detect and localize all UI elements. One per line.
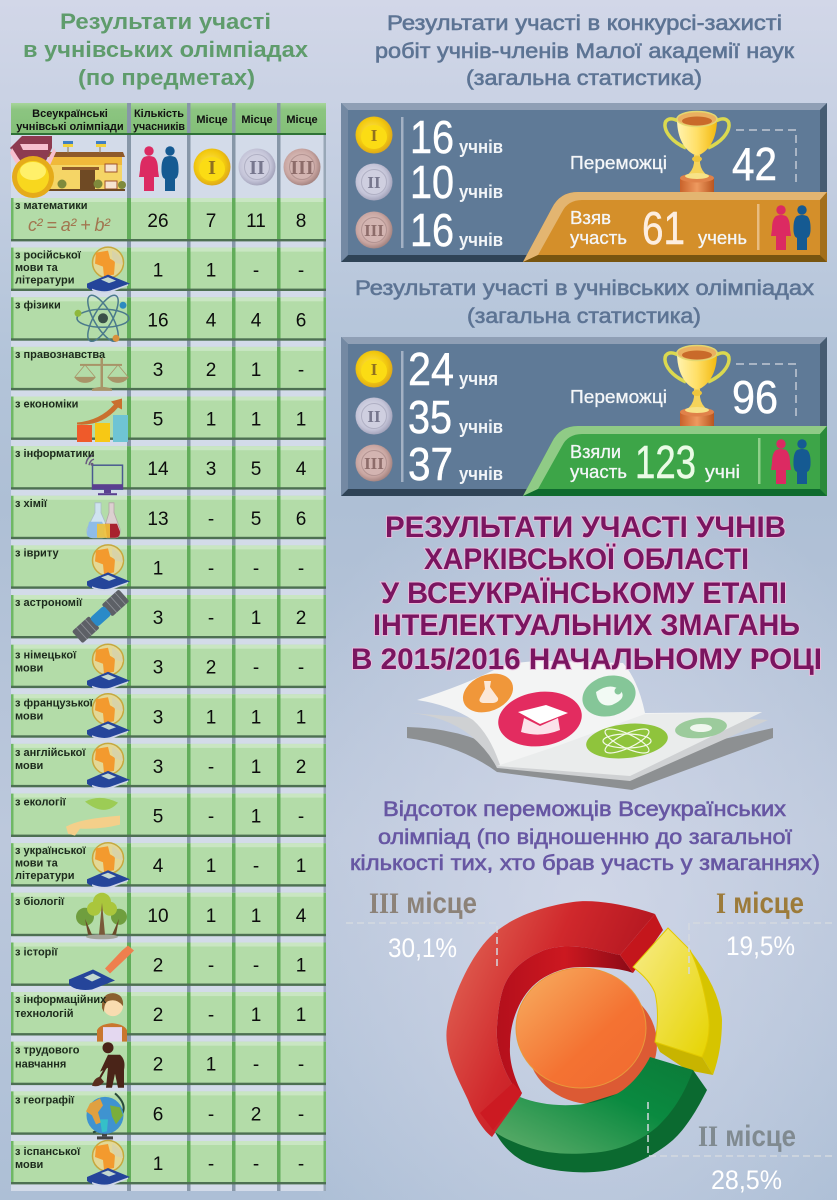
winners total with trophy xyxy=(570,112,796,192)
row: informatics xyxy=(11,446,326,495)
row: russian language and literature xyxy=(11,247,326,293)
medal counts: III xyxy=(364,221,384,240)
row: french: 1 xyxy=(296,707,306,728)
label: I place: 19,5% xyxy=(726,931,795,961)
segment: II place 28,5% xyxy=(495,1057,707,1172)
medal counts xyxy=(356,343,503,490)
row: economics: з економіки xyxy=(15,398,78,410)
row: economics: 5 xyxy=(153,410,163,430)
row: ecology: 5 xyxy=(153,807,163,828)
row: ecology: з екології xyxy=(15,797,67,809)
medal counts: I xyxy=(371,126,378,145)
row: mathematics: з математики xyxy=(15,200,88,212)
table header: учнівські олімпіади xyxy=(16,121,124,133)
label: II place: II місце xyxy=(698,1120,796,1153)
label: III place: 30,1% xyxy=(388,933,457,963)
medal counts xyxy=(356,111,503,256)
row: history xyxy=(11,942,326,990)
panel: olympiad overall statistics xyxy=(341,337,827,496)
row: information technology: з інформаційних xyxy=(15,994,107,1006)
illustration: open book with subject icons xyxy=(407,661,773,790)
row: chemistry: 5 xyxy=(251,509,261,530)
medal counts: 24 xyxy=(408,343,454,395)
row: informatics: 5 xyxy=(251,459,261,480)
row: french: з французької xyxy=(15,697,94,709)
participants banner: участь xyxy=(570,462,627,482)
row: ukrainian language and literature: 1 xyxy=(296,856,306,877)
row: biology: 1 xyxy=(251,906,261,927)
row: ukrainian language and literature: мови та xyxy=(15,858,59,870)
row: law: - xyxy=(298,360,304,381)
medal counts: учнів xyxy=(459,137,503,157)
row: physics: з фізики xyxy=(15,299,61,311)
medal counts: 10 xyxy=(410,156,454,208)
heading: percentage of winners xyxy=(350,798,820,875)
row: ecology: 1 xyxy=(251,807,261,828)
medal counts: учнів xyxy=(459,464,503,484)
heading: olympiad overall statistics: (загальна статистика) xyxy=(467,305,701,328)
row: information technology xyxy=(11,992,326,1042)
winners total with trophy: 42 xyxy=(732,138,777,190)
row: english: 1 xyxy=(251,757,261,778)
row: german: 2 xyxy=(206,658,216,679)
row: hebrew: - xyxy=(208,558,214,579)
row: history: - xyxy=(208,956,214,976)
participants banner: учень xyxy=(698,228,747,248)
participants banner: Взяв xyxy=(570,208,611,228)
main title: РЕЗУЛЬТАТИ УЧАСТІ УЧНІВ xyxy=(385,511,786,544)
row: labour training: - xyxy=(253,1055,259,1076)
icon row: medal and school: I xyxy=(208,157,216,179)
row: astronomy: 2 xyxy=(296,608,306,629)
main title: ІНТЕЛЕКТУАЛЬНИХ ЗМАГАНЬ xyxy=(373,609,800,642)
row: history: з історії xyxy=(15,946,58,958)
row: labour training: навчання xyxy=(15,1059,66,1071)
row: biology: 4 xyxy=(296,906,307,927)
row: spanish: з іспанської xyxy=(15,1146,81,1158)
table: olympiad results by subject xyxy=(10,103,326,1191)
row: german: мови xyxy=(15,663,43,675)
row: geography: 6 xyxy=(153,1104,163,1125)
heading: academy contest statistics xyxy=(375,12,795,90)
segment: I place 19,5% xyxy=(633,928,722,1075)
row: information technology: 1 xyxy=(251,1005,261,1026)
icon row: medal and school: III xyxy=(290,157,314,179)
row: biology: 1 xyxy=(206,906,216,927)
row: chemistry: 13 xyxy=(147,509,169,530)
participants banner: 123 xyxy=(635,436,696,488)
table header: Місце xyxy=(286,114,318,126)
row: chemistry: 6 xyxy=(296,509,306,530)
row: astronomy: 1 xyxy=(251,608,261,629)
row: biology: 10 xyxy=(147,906,169,927)
medal counts: 16 xyxy=(410,111,454,163)
row: chemistry: з хімії xyxy=(15,498,48,510)
row: biology xyxy=(11,893,326,939)
row: mathematics: 11 xyxy=(246,211,266,232)
row: hebrew: - xyxy=(253,558,259,579)
heading: olympiad overall statistics xyxy=(355,277,815,328)
row: english: - xyxy=(208,757,214,778)
panel: academy contest statistics xyxy=(341,103,827,262)
row: physics: 16 xyxy=(147,310,169,331)
row: informatics: з інформатики xyxy=(15,448,95,460)
row: german: з німецької xyxy=(15,650,77,662)
row: mathematics xyxy=(11,198,326,241)
medal counts: II xyxy=(367,173,381,192)
table header: Місце xyxy=(196,114,228,126)
row: information technology: 2 xyxy=(153,1005,163,1026)
row: law: 2 xyxy=(206,360,216,381)
row: astronomy xyxy=(11,589,326,643)
center disc xyxy=(516,968,657,1104)
row: spanish: - xyxy=(298,1154,304,1175)
row: labour training: з трудового xyxy=(15,1045,80,1057)
medal counts: учня xyxy=(459,369,498,389)
row: hebrew: 1 xyxy=(153,558,163,579)
row: information technology: 1 xyxy=(296,1005,306,1026)
row: english: з англійської xyxy=(15,747,86,759)
row: hebrew: з івриту xyxy=(15,547,59,559)
row: russian language and literature: - xyxy=(253,261,259,282)
row: geography xyxy=(11,1091,326,1139)
row: russian language and literature: - xyxy=(298,261,304,282)
row: physics: 4 xyxy=(251,310,262,331)
row: hebrew xyxy=(11,545,326,591)
row: russian language and literature: 1 xyxy=(153,261,163,282)
medal counts: учнів xyxy=(459,417,503,437)
icon: palette xyxy=(578,670,640,722)
row: german: - xyxy=(298,658,304,679)
main title: В 2015/2016 НАЧАЛЬНОМУ РОЦІ xyxy=(351,643,822,676)
row: chemistry: - xyxy=(208,509,214,530)
row: economics xyxy=(11,396,326,442)
row: german xyxy=(11,644,326,690)
row: physics xyxy=(11,291,326,345)
row: german: 3 xyxy=(153,658,163,679)
icon: atom xyxy=(584,720,670,762)
row: labour training: 2 xyxy=(153,1055,163,1076)
row: english: мови xyxy=(15,760,43,772)
winners total with trophy: Переможці xyxy=(570,387,667,407)
medal counts: I xyxy=(371,360,378,379)
table header xyxy=(11,103,326,135)
row: astronomy: - xyxy=(208,608,214,629)
label: II place: 28,5% xyxy=(711,1165,782,1195)
heading: results by subject: в учнівських олімпіадах xyxy=(23,37,309,62)
row: information technology: - xyxy=(208,1005,214,1026)
row: astronomy: з астрономії xyxy=(15,597,83,609)
row: french: 1 xyxy=(251,707,261,728)
main title xyxy=(351,511,822,676)
row: spanish: - xyxy=(253,1154,259,1175)
row: russian language and literature: літератури xyxy=(15,275,75,287)
row: mathematics: 8 xyxy=(296,211,306,232)
row: astronomy: 3 xyxy=(153,608,163,629)
row: russian language and literature: 1 xyxy=(206,261,216,282)
row: ecology: - xyxy=(298,807,304,828)
row: ukrainian language and literature xyxy=(11,843,326,889)
table header: учасників xyxy=(133,121,185,133)
row: french: 3 xyxy=(153,707,163,728)
heading: academy contest statistics: (загальна статистика) xyxy=(466,67,702,90)
row: labour training xyxy=(11,1042,326,1088)
participants banner xyxy=(523,192,827,262)
row: spanish: мови xyxy=(15,1159,43,1171)
row: labour training: - xyxy=(298,1055,304,1076)
row: history: - xyxy=(253,956,259,976)
medal counts: III xyxy=(364,454,384,473)
row: economics: 1 xyxy=(206,410,216,430)
row: informatics: 14 xyxy=(147,459,169,480)
participants banner: участь xyxy=(570,228,627,248)
row: geography: 2 xyxy=(251,1104,261,1125)
heading: academy contest statistics: Результати участі в конкурсі-захисті xyxy=(387,12,782,35)
label: III place: III місце xyxy=(369,887,477,920)
medal counts: учнів xyxy=(459,182,503,202)
heading: percentage of winners: олімпіад (по відношенню до загальної xyxy=(378,826,792,849)
row: physics: 4 xyxy=(206,310,217,331)
icon row: medal and school xyxy=(10,136,320,198)
row: geography: з географії xyxy=(15,1094,75,1106)
label: III place xyxy=(346,887,497,968)
icon: flask xyxy=(457,667,519,719)
row: french: 1 xyxy=(206,707,216,728)
table header: Кількість xyxy=(134,108,184,120)
row: russian language and literature: з російської xyxy=(15,250,82,262)
row: english: 3 xyxy=(153,757,163,778)
row: spanish: - xyxy=(208,1154,214,1175)
participants banner: учні xyxy=(705,462,740,482)
medal counts: II xyxy=(367,407,381,426)
row: french xyxy=(11,694,326,740)
row: geography: - xyxy=(298,1104,304,1125)
main title: ХАРКІВСЬКОЇ ОБЛАСТІ xyxy=(424,543,749,576)
row: labour training: 1 xyxy=(206,1055,216,1076)
row: mathematics: 26 xyxy=(147,211,169,232)
row: ukrainian language and literature: 1 xyxy=(206,856,216,877)
chart: ring of winners by place xyxy=(446,901,722,1172)
row: history: 2 xyxy=(153,956,163,976)
row: mathematics: 7 xyxy=(206,211,216,232)
row: ukrainian language and literature: літератури xyxy=(15,870,75,882)
row: english: 2 xyxy=(296,757,306,778)
row: history: 1 xyxy=(296,956,306,976)
row: english xyxy=(11,743,326,789)
row: law: 1 xyxy=(251,360,261,381)
table header: Місце xyxy=(241,114,273,126)
icon: graduation cap xyxy=(495,686,585,752)
row: geography: - xyxy=(208,1104,214,1125)
participants banner xyxy=(523,426,827,496)
row: law xyxy=(11,347,326,391)
winners total with trophy xyxy=(570,346,796,426)
label: II place xyxy=(648,1102,832,1195)
heading: results by subject: Результати участі xyxy=(60,9,271,34)
row: law: 3 xyxy=(153,360,163,381)
row: informatics: 4 xyxy=(296,459,307,480)
medal counts: 35 xyxy=(408,391,452,443)
label: I place: I місце xyxy=(716,887,804,920)
main title: У ВСЕУКРАЇНСЬКОМУ ЕТАПІ xyxy=(381,577,787,610)
icon: small badge xyxy=(674,715,728,741)
row: russian language and literature: мови та xyxy=(15,262,59,274)
participants banner: 61 xyxy=(642,202,685,254)
row: law: з правознавства xyxy=(15,349,106,361)
row: hebrew: - xyxy=(298,558,304,579)
row: information technology: технологій xyxy=(15,1008,74,1020)
participants banner: Взяли xyxy=(570,442,621,462)
row: french: мови xyxy=(15,710,43,722)
heading: percentage of winners: кількості тих, хто брав участь у змаганнях) xyxy=(350,852,820,875)
row: mathematics: c² = a² + b² xyxy=(28,215,111,235)
icon row: medal and school: II xyxy=(249,157,265,179)
heading: olympiad overall statistics: Результати участі в учнівських олімпіадах xyxy=(355,277,815,300)
row: german: - xyxy=(253,658,259,679)
heading: percentage of winners: Відсоток переможців Всеукраїнських xyxy=(383,798,787,821)
heading: academy contest statistics: робіт учнів-членів Малої академії наук xyxy=(375,40,795,63)
label: I place xyxy=(689,887,832,978)
medal counts: 37 xyxy=(408,438,453,490)
row: ukrainian language and literature: 4 xyxy=(153,856,164,877)
row: spanish xyxy=(11,1140,326,1186)
heading: results by subject: (по предметах) xyxy=(78,65,255,90)
row: ukrainian language and literature: з української xyxy=(15,845,87,857)
medal counts: 16 xyxy=(410,204,454,256)
winners total with trophy: Переможці xyxy=(570,153,667,173)
table header: Всеукраїнські xyxy=(32,108,108,120)
row: ecology: - xyxy=(208,807,214,828)
segment: III place 30,1% xyxy=(446,901,663,1137)
row: spanish: 1 xyxy=(153,1154,163,1175)
row: ukrainian language and literature: - xyxy=(253,856,259,877)
row: chemistry xyxy=(11,496,326,539)
row: economics: 1 xyxy=(251,410,261,430)
row: physics: 6 xyxy=(296,310,306,331)
row: biology: з біології xyxy=(15,896,65,908)
row: ecology xyxy=(11,794,326,837)
winners total with trophy: 96 xyxy=(732,371,778,423)
medal counts: учнів xyxy=(459,230,503,250)
heading: results by subject xyxy=(23,9,309,90)
row: informatics: 3 xyxy=(206,459,216,480)
row: economics: 1 xyxy=(296,410,306,430)
